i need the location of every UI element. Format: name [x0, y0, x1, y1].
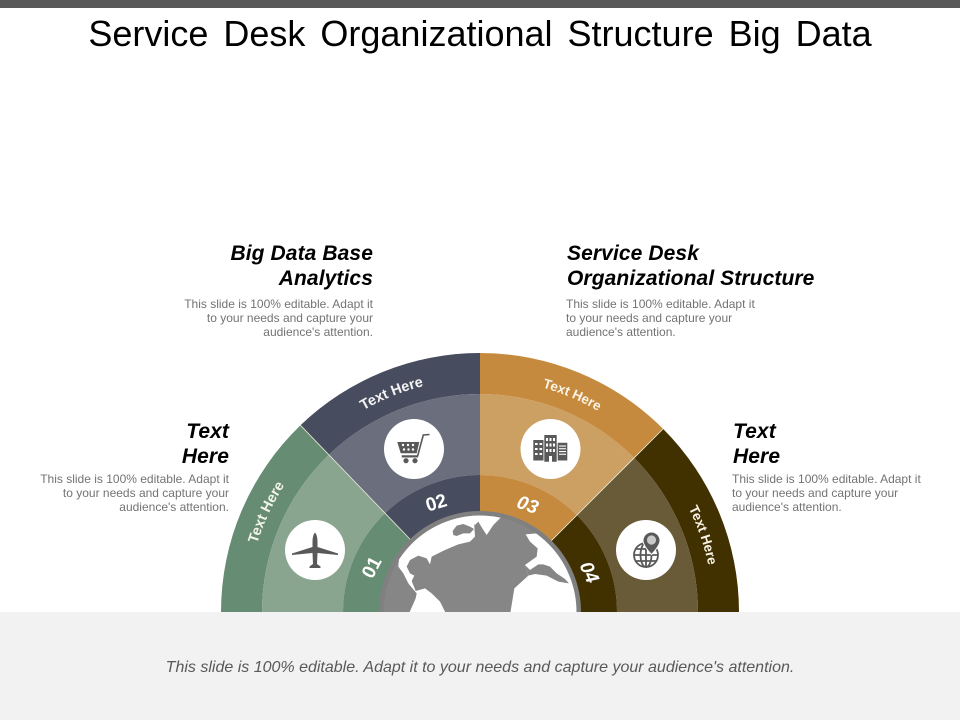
- description: right text here: to your needs and capture your: [732, 486, 898, 500]
- heading: service desk organizational structure: Organizational Structure: [567, 267, 814, 290]
- heading: right text here: Text: [733, 420, 776, 443]
- segment 03 orange: [480, 353, 663, 540]
- description: service desk organizational structure: This slide is 100% editable. Adapt it: [566, 297, 755, 311]
- description: big data base analytics: audience's attention.: [263, 325, 373, 339]
- description: right text here: This slide is 100% editable. Adapt it: [732, 472, 921, 486]
- heading: left text here: [182, 420, 230, 468]
- heading: left text here: Text: [186, 420, 229, 443]
- icon: airplane: [285, 520, 345, 580]
- description: right text here: [732, 472, 921, 514]
- label: text here 02: Text Here: [358, 379, 423, 409]
- heading: service desk organizational structure: Service Desk: [567, 242, 699, 265]
- description: left text here: to your needs and capture your: [63, 486, 229, 500]
- number 04: 04: [575, 559, 603, 587]
- semicircular diagram: [221, 353, 739, 612]
- icon: globe with pin: [616, 520, 676, 580]
- segment 01 green: [221, 425, 410, 612]
- description: left text here: This slide is 100% editable. Adapt it: [40, 472, 229, 486]
- label: text here 04: Text Here: [690, 504, 715, 564]
- description: left text here: audience's attention.: [119, 500, 229, 514]
- footer text: This slide is 100% editable. Adapt it to your needs and capture your audience's attention.: [166, 659, 794, 676]
- number 03: 03: [514, 492, 541, 519]
- segment 02 navy: [300, 353, 480, 539]
- heading: right text here: Here: [733, 445, 780, 468]
- heading: big data base analytics: [230, 242, 373, 290]
- icon: shopping cart: [384, 419, 444, 479]
- description: big data base analytics: to your needs and capture your: [207, 311, 373, 325]
- heading: left text here: Here: [182, 445, 229, 468]
- description: big data base analytics: [184, 297, 373, 339]
- number 02: 02: [423, 490, 450, 517]
- segment 04 brown: [552, 428, 739, 612]
- heading: right text here: [733, 420, 780, 468]
- icon: office buildings: [520, 419, 580, 479]
- top bar: [0, 0, 960, 8]
- description: service desk organizational structure: to your needs and capture your: [566, 311, 732, 325]
- globe: [379, 511, 581, 612]
- segment seams: [300, 425, 663, 541]
- description: service desk organizational structure: audience's attention.: [566, 325, 676, 339]
- description: left text here: [40, 472, 229, 514]
- number 01: 01: [358, 553, 387, 582]
- description: big data base analytics: This slide is 100% editable. Adapt it: [184, 297, 373, 311]
- title: Service Desk Organizational Structure Big Data: [88, 13, 872, 54]
- description: service desk organizational structure: [566, 297, 755, 339]
- description: right text here: audience's attention.: [732, 500, 842, 514]
- label: text here 01: Text Here: [248, 482, 284, 542]
- heading: service desk organizational structure: [567, 242, 814, 290]
- bottom band: [0, 612, 960, 720]
- label: text here 03: Text Here: [544, 378, 600, 410]
- heading: big data base analytics: Analytics: [279, 267, 373, 290]
- heading: big data base analytics: Big Data Base: [230, 242, 373, 265]
